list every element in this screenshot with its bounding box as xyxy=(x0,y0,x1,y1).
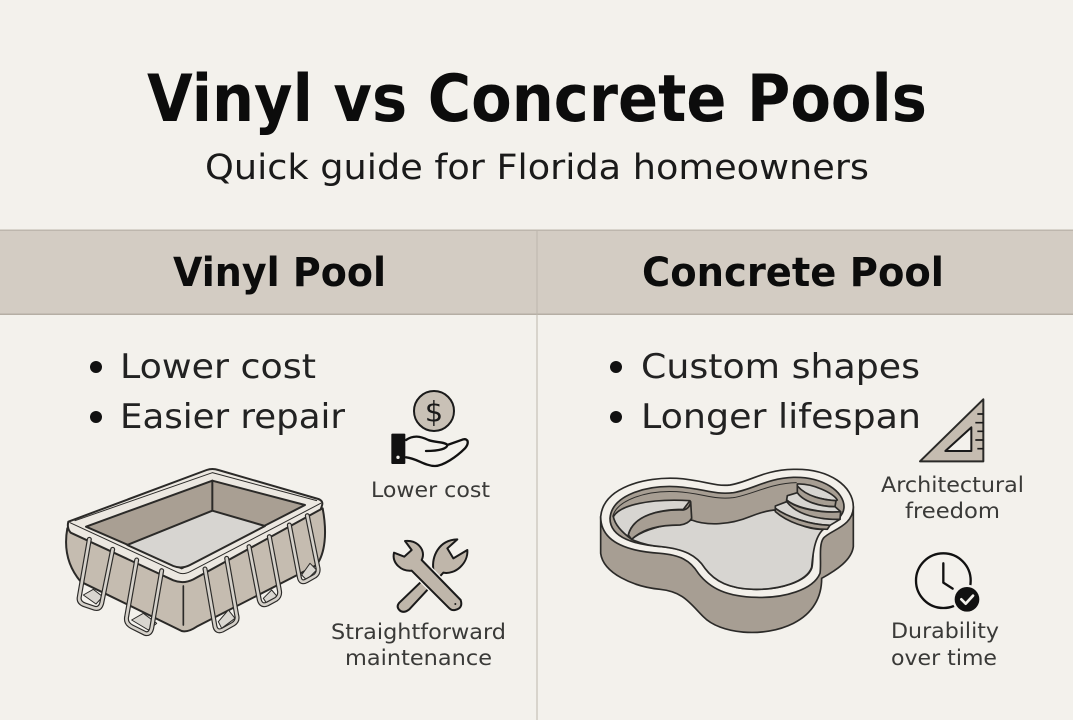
caption: straightforward maintenance: Straightforward xyxy=(331,620,506,644)
steps xyxy=(775,484,841,529)
caption: durability over time: over time xyxy=(891,646,997,670)
icon: crossed wrenches xyxy=(394,539,467,612)
icon: hand holding coin: $ xyxy=(425,394,443,428)
illustration: vinyl above-ground pool xyxy=(66,469,325,634)
icon: set square xyxy=(920,399,983,461)
icon: hand holding coin xyxy=(391,391,468,466)
concrete bullet list xyxy=(610,347,921,437)
vinyl bullet list: Lower cost xyxy=(120,347,316,387)
subtitle: Quick guide for Florida homeowners xyxy=(205,148,869,188)
vinyl bullet list: Easier repair xyxy=(120,397,345,437)
title: Vinyl vs Concrete Pools xyxy=(147,62,927,137)
caption: architectural freedom xyxy=(881,473,1024,523)
caption: architectural freedom: Architectural xyxy=(881,473,1024,497)
caption: lower cost: Lower cost xyxy=(371,478,490,502)
header band xyxy=(0,230,1073,315)
icon: clock with check xyxy=(916,553,982,614)
caption: durability over time: Durability xyxy=(891,619,999,643)
caption: durability over time xyxy=(891,619,999,670)
concrete bullet list: Longer lifespan xyxy=(641,397,921,437)
heading: vinyl pool: Vinyl Pool xyxy=(173,250,386,296)
caption: architectural freedom: freedom xyxy=(905,499,1000,523)
caption: straightforward maintenance xyxy=(331,620,506,670)
illustration: concrete freeform pool xyxy=(601,469,853,632)
caption: straightforward maintenance: maintenance xyxy=(345,646,492,670)
vinyl bullet list xyxy=(90,347,345,437)
heading: concrete pool: Concrete Pool xyxy=(642,250,944,296)
concrete bullet list: Custom shapes xyxy=(641,347,920,387)
